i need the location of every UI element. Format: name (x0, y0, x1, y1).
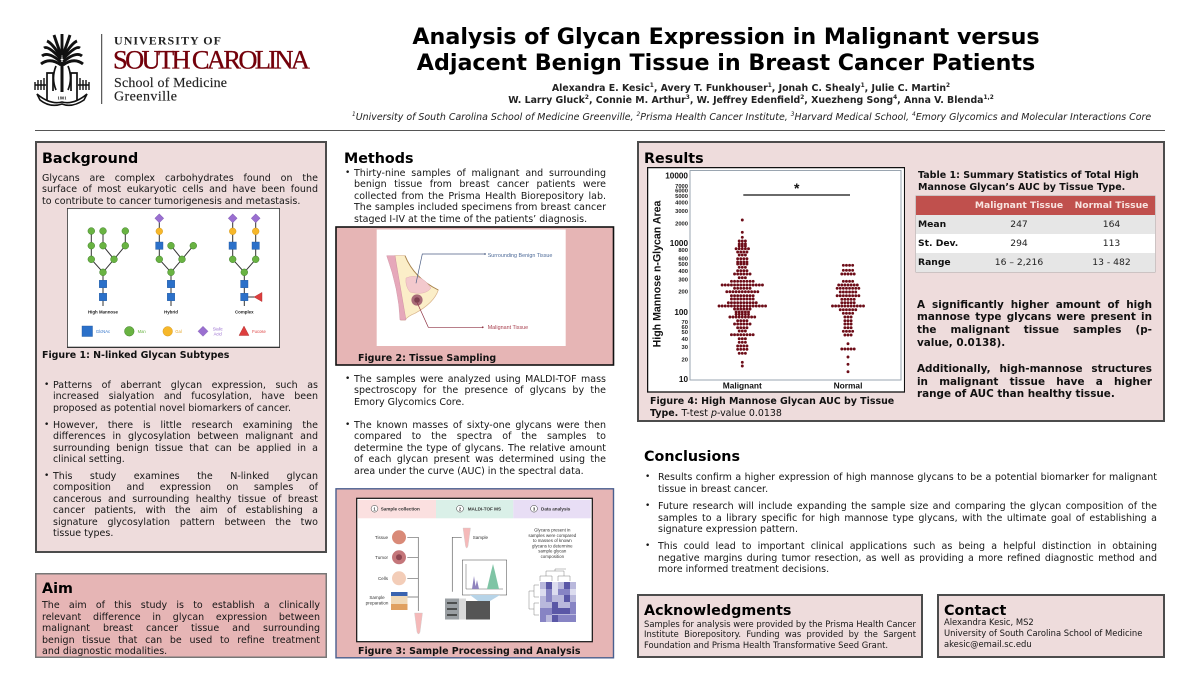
icon: breast cross-section (387, 256, 438, 320)
bullet 3: cancerous and surrounding healthy tissue of breast (53, 494, 318, 505)
table caption: Table 1: Summary Statistics of Total High (918, 170, 1139, 180)
panel: methods: • (345, 420, 350, 430)
caption: figure 4: Figure 4: High Mannose Glycan AUC by Tissue (650, 396, 894, 406)
text: results finding (917, 298, 1152, 349)
caption: figure 2: Figure 2: Tissue Sampling (358, 352, 496, 364)
axis tick labels: 1000 (670, 239, 688, 248)
chart: high mannose glycan AUC dot plot: 600 (678, 256, 688, 262)
figure 3: sample processing and analysis: glycans to determine (532, 543, 573, 548)
text: methods bullet 1: Thirty-nine samples of malignant and surrounding (354, 168, 606, 178)
text: methods bullet 1: staged I-IV at the time of the patients’ diagnosis. (354, 214, 587, 225)
axis tick labels (665, 172, 688, 384)
axis title: High Mannose n-Glycan Area (652, 201, 664, 347)
text: methods bullet 3 (354, 420, 606, 477)
table: summary statistics (916, 196, 1155, 272)
text: logo wordmark: SOUTH CAROLINA (113, 44, 310, 74)
chart: high mannose glycan AUC dot plot: 20 (682, 357, 688, 363)
bullet: conclusion 3 (658, 541, 1157, 575)
icon: palmetto tree seal (35, 34, 89, 105)
heading: contact: Contact (944, 603, 1006, 619)
figure 3: sample processing and analysis: Tumor (375, 555, 388, 560)
panel: methods: • (345, 374, 350, 384)
text: results range: Additionally, high-mannose structures (917, 363, 1152, 375)
caption: figure 4: Type. T-test p-value 0.0138 (650, 408, 782, 418)
bullet 2 (53, 420, 318, 465)
panel: conclusions: • (645, 501, 650, 511)
title (412, 24, 1040, 76)
chart: high mannose glycan AUC dot plot: 800 (678, 248, 688, 254)
panel: background (35, 141, 327, 553)
text: aim: benign tissue that can be used to refine treatment (42, 635, 320, 646)
figure 1: n-linked glycan subtypes: Gal (175, 329, 182, 334)
series: malignant dots (719, 220, 766, 366)
chart: high mannose glycan AUC dot plot: 4000 (675, 200, 688, 206)
text: methods bullet 3: area under the curve (AUC) in the spectral data. (354, 466, 584, 477)
text: methods bullet 2: spectroscopy for the presence of glycans by the (354, 385, 606, 396)
heading: conclusions: Conclusions (644, 449, 740, 465)
chart: high mannose glycan AUC dot plot: 60 (682, 325, 688, 331)
caption: figure 1: Figure 1: N-linked Glycan Subtypes (42, 350, 229, 360)
heading: background: Background (42, 151, 138, 167)
chart: high mannose glycan AUC dot plot: 70 (682, 320, 688, 326)
text: contact details: Alexandra Kesic, MS2 (944, 617, 1034, 627)
panel: aim (35, 573, 327, 658)
bullet 1: Patterns of aberrant glycan expression, such as (53, 380, 318, 390)
text: contact details (944, 617, 1142, 649)
figure 3: sample processing and analysis: to masses of known (533, 538, 572, 543)
text: methods bullet 3: of each glycan present was determined using the (354, 454, 606, 465)
caption: figure 3: Figure 3: Sample Processing and Analysis (358, 646, 580, 656)
text: results finding: value, 0.0138). (917, 337, 1005, 349)
series: normal dots (832, 265, 864, 372)
figure 3: sample processing and analysis: 1 (373, 506, 376, 511)
caption: figure 4 (650, 396, 894, 418)
panel: results (637, 141, 1165, 422)
figure 3: sample processing and analysis (335, 488, 614, 658)
text: acknowledgments: Institute Biorepository. Funding was provided by the Sargent (644, 629, 916, 639)
text: aim: relevant difference in glycan expression between (42, 612, 320, 623)
figure 3: sample processing and analysis: samples were compared (528, 533, 577, 538)
text: background intro: Glycans are complex carbohydrates found on the (42, 172, 318, 184)
bullet: conclusion 2 (658, 501, 1157, 535)
text: methods bullet 2: The samples were analyzed using MALDI-TOF mass (354, 374, 606, 384)
figure 3: sample processing and analysis: 2 (459, 506, 462, 511)
bullet 1 (53, 380, 318, 414)
bullet 1: proposed as potential novel biomarkers of cancer. (53, 403, 291, 414)
bullet: conclusion 3: This could lead to important clinical applications such as being a helpful distinction in obtaining (658, 541, 1157, 552)
panel: contact (937, 594, 1165, 658)
authors: W. Larry Gluck2, Connie M. Arthur3, W. Jeffrey Edenfield2, Xuezheng Song4, Anna V. Blenda1,2 (508, 95, 994, 106)
bullet list: background (44, 380, 318, 539)
panel: methods: • (345, 168, 350, 178)
panel: conclusions: • (645, 541, 650, 551)
bullet 2: clinical setting. (53, 454, 125, 465)
figure 1: n-linked glycan subtypes: Fucose (252, 329, 267, 334)
bullet 3 (52, 470, 318, 539)
axis tick labels: 100 (674, 308, 688, 317)
text: methods bullet 1: benign tissue from breast cancer patients were (354, 179, 606, 190)
chart: high mannose glycan AUC dot plot: 30 (682, 345, 688, 351)
bullet: conclusion 3: more informed treatment decisions. (658, 564, 829, 575)
chart: high mannose glycan AUC dot plot: 40 (682, 337, 688, 343)
figure 1: n-linked glycan subtypes: Acid (214, 331, 222, 336)
figure 3: sample processing and analysis: MALDI-TOF MS (468, 506, 501, 512)
logo: University of South Carolina School of Medicine Greenville: 1801 (58, 96, 67, 100)
text: methods bullet 1: The samples included specimens from breast cancer (354, 202, 606, 213)
text: methods bullet 2: Emory Glycomics Core. (354, 397, 464, 408)
figure 3: sample processing and analysis: preparation (366, 600, 389, 606)
table: summary statistics: 294 (1010, 238, 1028, 249)
figure 2: tissue sampling: Malignant Tissue (488, 325, 528, 331)
bullet 1: increased sialyation and fucosylation, have been (53, 391, 318, 402)
chart: high mannose glycan AUC dot plot (647, 167, 905, 393)
bullet 3: tissue types. (53, 528, 113, 539)
authors: Alexandra E. Kesic1, Avery T. Funkhouser1, Jonah C. Shealy1, Julie C. Martin2 (552, 83, 950, 94)
chart: high mannose glycan AUC dot plot: 50 (682, 330, 688, 336)
bullet list: background: • (44, 420, 49, 430)
chart: high mannose glycan AUC dot plot: 400 (678, 269, 688, 275)
x axis labels (723, 380, 862, 390)
axis tick labels: 10 (679, 375, 688, 384)
figure 1: n-linked glycan subtypes: GlcNAc (96, 329, 110, 334)
text: acknowledgments (644, 618, 916, 650)
heading: results: Results (644, 151, 704, 167)
text: logo wordmark: UNIVERSITY OF (114, 34, 221, 48)
text: aim (42, 600, 320, 657)
bullet list: background: • (44, 470, 49, 480)
table: summary statistics: St. Dev. (918, 238, 958, 249)
figure 1: n-linked glycan subtypes (67, 208, 280, 348)
text: results finding: A significantly higher amount of high (917, 298, 1152, 310)
heading: methods: Methods (344, 151, 414, 167)
axis tick labels: 10000 (665, 172, 688, 181)
text: contact details: University of South Carolina School of Medicine (944, 628, 1142, 638)
panel: methods (335, 151, 614, 658)
table caption: Mannose Glycan’s AUC by Tissue Type. (918, 182, 1125, 192)
title: Analysis of Glycan Expression in Malignant versus (412, 24, 1040, 50)
bullet list: background: • (44, 380, 49, 390)
table: summary statistics: 113 (1103, 238, 1120, 249)
table caption (918, 170, 1139, 192)
text: methods bullet 3: compared to the spectra of the samples to (354, 431, 606, 442)
text: background intro: surface of most eukaryotic cells and have been found (42, 184, 318, 195)
figure 3: sample processing and analysis: Sample collection (381, 506, 420, 512)
text: aim: malignant breast cancer tissue and surrounding (42, 623, 320, 634)
text: results finding: the malignant tissue samples (p- (917, 324, 1152, 336)
figure 1: n-linked glycan subtypes: Man (138, 329, 146, 334)
figure 3: sample processing and analysis: Tissue (375, 535, 388, 540)
figure 2: tissue sampling (335, 226, 614, 366)
chart: heatmap (529, 569, 576, 622)
table: summary statistics: Range (918, 257, 951, 268)
table: summary statistics: Mean (918, 219, 946, 230)
bullet: conclusion 3: negative margins during tumor resection, as well as providing a more refined diagnostic method and (658, 553, 1157, 564)
significance bar (743, 180, 850, 196)
bullet: conclusion 1: tissue in breast cancer. (658, 484, 768, 495)
bullet: conclusion 2: Future research will include expanding the sample size and comparing the glycan composition of the (658, 501, 1157, 512)
text: results range: in malignant tissue have a higher (917, 376, 1152, 388)
table: summary statistics: Normal Tissue (1075, 200, 1148, 211)
figure 3: sample processing and analysis: Sample (369, 595, 385, 600)
text: methods bullet 3: determine the type of glycans. The relative amount (354, 443, 606, 454)
figure 3: sample processing and analysis: Sample (473, 535, 488, 540)
figure 3: sample processing and analysis: composition (541, 554, 565, 559)
text: acknowledgments: Samples for analysis were provided by the Prisma Health Cancer (644, 618, 916, 628)
figure 1: n-linked glycan subtypes: Hybrid (164, 310, 178, 315)
chart: high mannose glycan AUC dot plot: 5000 (675, 194, 688, 200)
chart: high mannose glycan AUC dot plot: 200 (678, 289, 688, 295)
figure 1: n-linked glycan subtypes: Sialic (213, 326, 223, 331)
text: results finding: mannose type glycans were present in (917, 311, 1152, 323)
figure 3: sample processing and analysis: Data analysis (541, 506, 571, 512)
table: summary statistics: 16 – 2,216 (995, 257, 1043, 268)
affiliations: 1University of South Carolina School of Medicine Greenville, 2Prisma Health Cancer Institute, 3Harvard Medical School, 4Emory Glycomics and Molecular Interactions Core (352, 112, 1151, 123)
chart: high mannose glycan AUC dot plot: 3000 (675, 209, 688, 215)
text: acknowledgments: Foundation and Prisma Health Transformative Seed Grant. (644, 640, 888, 650)
bullet 3: composition and expression on samples of (53, 482, 318, 493)
figure 3: sample processing and analysis: Cells (378, 576, 389, 581)
significance bar: * (794, 180, 800, 196)
heading: aim: Aim (42, 581, 73, 597)
table: summary statistics: 13 - 482 (1092, 257, 1131, 268)
authors (508, 82, 994, 106)
bullet: conclusion 2: signature expression pattern. (658, 524, 798, 535)
bullet 3: cancer patients, with the aim of establishing a (53, 505, 318, 516)
bullet 3: This study examines the N-linked glycan (53, 470, 318, 482)
text: methods bullet 2 (354, 374, 606, 408)
title: Adjacent Benign Tissue in Breast Cancer Patients (417, 50, 1035, 76)
table: summary statistics: 164 (1103, 219, 1120, 230)
figure 3: sample processing and analysis: Glycans present in (534, 528, 571, 532)
chart: high mannose glycan AUC dot plot: 7000 (675, 184, 688, 190)
panel: conclusions: • (645, 472, 650, 482)
text: logo wordmark: School of Medicine (114, 76, 227, 91)
text: logo wordmark (113, 34, 310, 104)
text: methods bullet 3: The known masses of sixty-one glycans were then (354, 420, 606, 430)
figure 1: n-linked glycan subtypes: Complex (235, 310, 254, 315)
text: logo wordmark: Greenville (114, 90, 177, 104)
text: background intro (42, 172, 318, 207)
text: methods bullet 1: collected from the Prisma Health Biorepository lab. (354, 191, 606, 202)
panel: acknowledgments (637, 594, 923, 658)
bullet 2: surrounding benign tissue that can be applied in a (53, 443, 318, 454)
chart: high mannose glycan AUC dot plot: 6000 (675, 188, 688, 194)
chart: high mannose glycan AUC dot plot: 500 (678, 262, 688, 268)
text: contact details: akesic@email.sc.edu (944, 639, 1032, 649)
chart: high mannose glycan AUC dot plot: 2000 (675, 221, 688, 227)
bullet 2: differences in glycosylation between malignant and (53, 431, 318, 442)
x axis labels: Normal (834, 380, 862, 390)
bullet: conclusion 1: Results confirm a higher expression of high mannose glycans to be a potential biomarker for malignant (658, 472, 1157, 483)
figure 1: n-linked glycan subtypes: High Mannose (88, 310, 119, 315)
panel: conclusions (644, 449, 1157, 575)
bullet: conclusion 1 (658, 472, 1157, 495)
table: summary statistics: 247 (1010, 219, 1028, 230)
text: results range (917, 363, 1152, 400)
figure 2: tissue sampling: Surrounding Benign Tissue (488, 253, 552, 259)
bullet: conclusion 2: samples to a library specific for high mannose type glycans, with the ultimate goal of establishing a (658, 513, 1157, 524)
bullet 3: signature glycosylation pattern between the two (53, 517, 318, 528)
text: results range: range of AUC than healthy tissue. (917, 388, 1115, 400)
bullet 2: However, there is little research examining the (53, 420, 318, 430)
heading: acknowledgments: Acknowledgments (644, 603, 791, 619)
table: summary statistics: Malignant Tissue (975, 200, 1063, 211)
text: aim: and diagnostic modalities. (42, 646, 167, 657)
logo: University of South Carolina School of Medicine Greenville (34, 34, 310, 106)
figure 3: sample processing and analysis: sample glycan (538, 549, 567, 554)
text: aim: The aim of this study is to establish a clinically (42, 600, 320, 611)
figure 3: sample processing and analysis: 3 (533, 506, 536, 511)
x axis labels: Malignant (723, 380, 762, 390)
text: methods bullet 1 (354, 168, 606, 225)
chart: high mannose glycan AUC dot plot: 300 (678, 277, 688, 283)
text: background intro: to contribute to cancer tumorigenesis and metastasis. (42, 196, 300, 207)
